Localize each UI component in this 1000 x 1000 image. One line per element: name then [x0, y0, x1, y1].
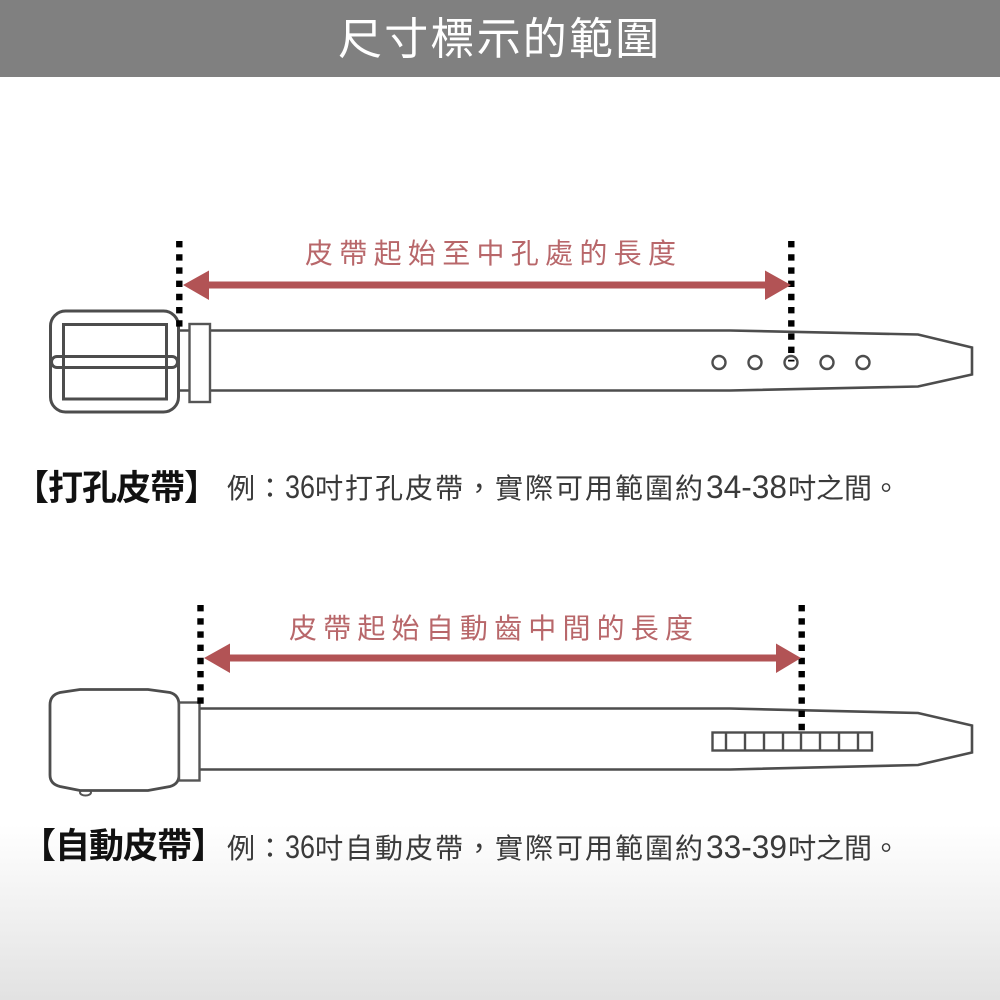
caption text: 吋自動皮帶，實際可用範圍約	[315, 833, 705, 864]
panel: punched-hole belt diagram	[50, 238, 972, 412]
panel: automatic-ratchet belt diagram	[50, 605, 972, 796]
caption text: 吋之間。	[788, 473, 900, 504]
belt strap	[179, 330, 972, 390]
caption text: 36	[285, 829, 315, 865]
caption: automatic-ratchet belt	[21, 827, 900, 866]
caption text	[227, 829, 900, 865]
automatic buckle	[50, 690, 179, 790]
measure label: 皮帶起始自動齒中間的長度	[289, 613, 693, 644]
caption text: 吋打孔皮帶，實際可用範圍約	[315, 473, 705, 504]
caption heading: 【打孔皮帶】	[14, 469, 218, 508]
belt buckle	[50, 311, 178, 412]
caption text: 36	[285, 469, 315, 505]
belt holes	[712, 356, 870, 369]
belt strap	[200, 708, 972, 770]
measure arrow	[183, 270, 791, 300]
buckle connector	[179, 702, 200, 780]
caption: punched-hole belt	[14, 469, 900, 508]
caption text: 例：	[227, 473, 285, 504]
caption text	[227, 469, 900, 505]
ratchet teeth	[712, 732, 872, 750]
caption text: 吋之間。	[788, 833, 900, 864]
left dotted marker	[176, 241, 183, 327]
title banner	[0, 0, 1000, 77]
title: 尺寸標示的範圍	[338, 15, 661, 64]
right dotted marker	[788, 241, 794, 362]
caption text: 33-39	[706, 829, 787, 865]
caption heading: 【自動皮帶】	[21, 827, 225, 866]
buckle clasp	[80, 790, 91, 796]
measure arrow	[204, 644, 801, 673]
belt loop	[190, 324, 210, 402]
caption text: 例：	[227, 833, 285, 864]
left dotted marker	[197, 605, 204, 705]
right dotted marker	[799, 605, 805, 731]
caption text: 34-38	[706, 469, 787, 505]
measure label: 皮帶起始至中孔處的長度	[305, 238, 676, 269]
